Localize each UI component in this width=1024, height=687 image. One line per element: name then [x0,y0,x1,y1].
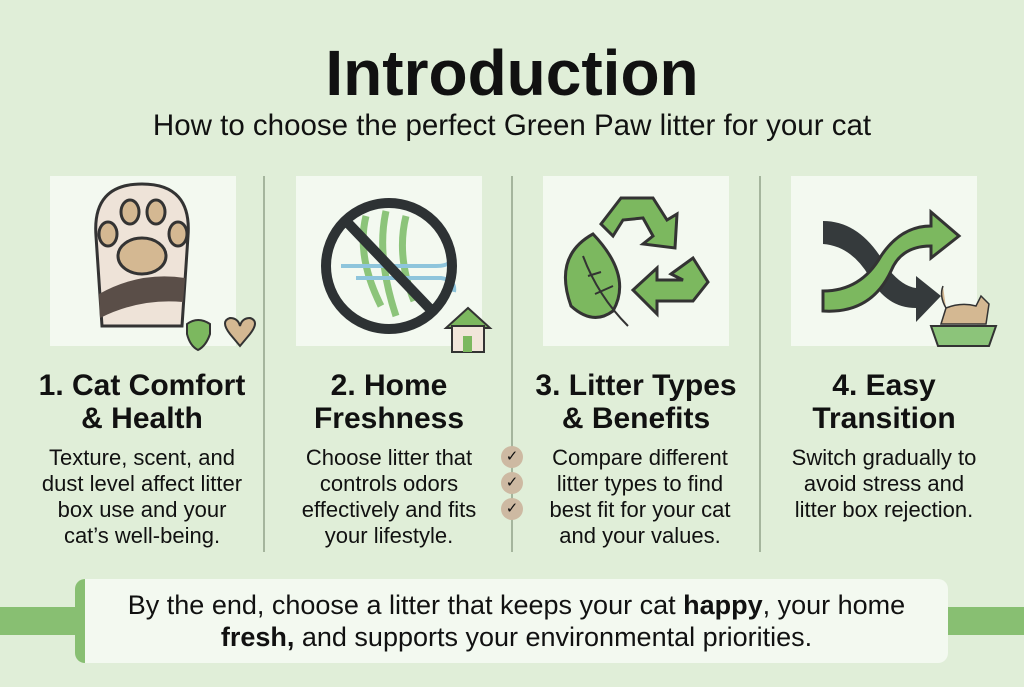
heading [812,369,956,435]
text: best fit for your cat [550,497,730,522]
text: box use and your [58,497,226,522]
text: Choose litter that [306,445,472,470]
checkmarks: ✓ [506,500,518,517]
text: dust level affect litter [42,471,242,496]
title: Introduction [325,37,699,109]
icon: paw [50,176,236,346]
text: your lifestyle. [325,523,453,548]
text: effectively and fits [302,497,476,522]
text: and your values. [559,523,721,548]
checkmarks: ✓ [506,448,518,465]
heading: Transition [812,402,956,435]
bottom band [0,607,1024,635]
heading: 4. Easy [832,369,936,402]
text: controls odors [320,471,458,496]
text: litter box rejection. [795,497,973,522]
callout: conclusion: fresh, and supports your environmental priorities. [221,622,812,652]
checkmarks: ✓ [506,474,518,491]
heading: & Benefits [562,402,710,435]
text: Texture, scent, and [49,445,235,470]
heading: & Health [81,402,203,435]
checkmarks [501,446,523,520]
icon: no odor [296,176,482,346]
heading: 3. Litter Types [535,369,737,402]
heading [535,369,737,435]
panel: home freshness [296,176,492,548]
icon: shuffle arrows with cat [791,176,977,346]
text: Switch gradually to [792,445,976,470]
text: Compare different [552,445,728,470]
callout: conclusion [75,579,948,663]
heading [314,369,464,435]
panel: cat comfort [39,176,256,548]
text [792,445,976,522]
text: avoid stress and [804,471,964,496]
heading: 2. Home [331,369,447,402]
text: cat’s well-being. [64,523,220,548]
callout: conclusion: By the end, choose a litter that keeps your cat happy, your home [128,590,905,620]
text [42,445,242,548]
subtitle: How to choose the perfect Green Paw litter for your cat [153,109,871,142]
icon: recycle leaf [543,176,729,346]
text [302,445,476,548]
text [550,445,730,548]
text: litter types to find [557,471,723,496]
panel: litter types [535,176,737,548]
heading: 1. Cat Comfort [39,369,245,402]
panel: easy transition [791,176,998,522]
heading: Freshness [314,402,464,435]
heading [39,369,245,435]
